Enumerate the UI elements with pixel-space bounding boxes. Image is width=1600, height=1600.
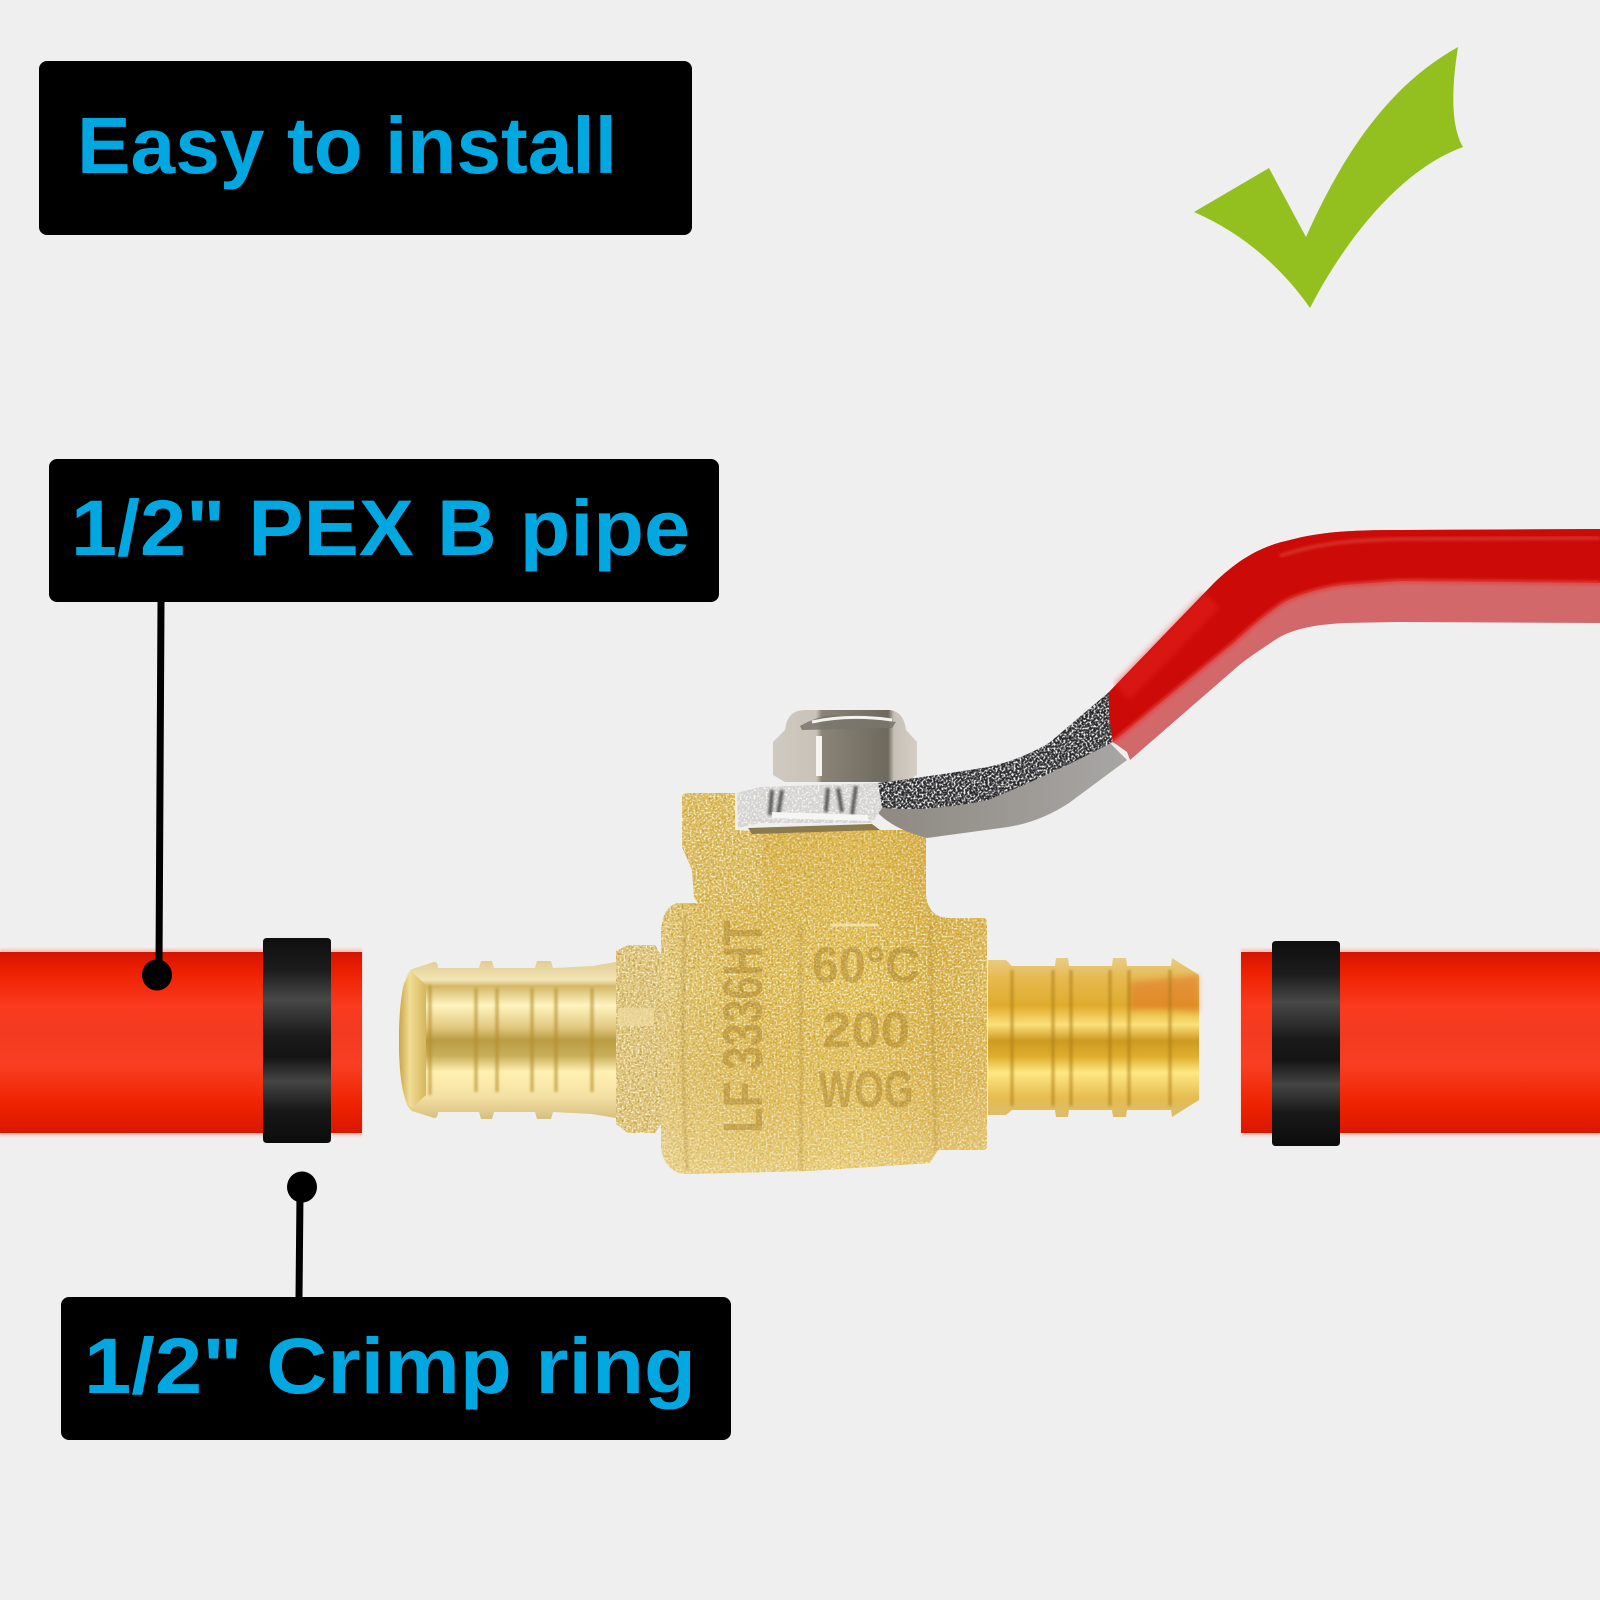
leader: crimp ring [287, 1172, 317, 1297]
label: 1/2" PEX B pipe [49, 459, 719, 602]
lever underside [878, 743, 1127, 838]
embossed body markings: LF 3336HT [711, 920, 774, 1133]
embossed body markings: 60°C [812, 937, 920, 993]
label: 1/2" PEX B pipe: 1/2" PEX B pipe [71, 483, 690, 572]
hex collar [616, 945, 664, 1133]
right crimp ring [1272, 941, 1340, 1146]
label: Easy to install [39, 61, 692, 235]
label: Easy to install: Easy to install [77, 101, 617, 190]
lever pivot tab [682, 793, 772, 906]
chrome washer [737, 783, 882, 834]
hex nut [773, 710, 917, 782]
right barbed fitting [988, 958, 1199, 1117]
label: 1/2" Crimp ring [61, 1297, 731, 1440]
embossed body markings: WOG [818, 1061, 914, 1119]
embossed body markings: 200 [822, 1002, 910, 1058]
right PEX pipe [1241, 949, 1600, 1136]
icon: green check mark [1194, 47, 1463, 308]
label: 1/2" Crimp ring: 1/2" Crimp ring [84, 1321, 696, 1410]
left crimp ring [263, 938, 331, 1143]
embossed body markings [711, 920, 920, 1133]
leader: PEX pipe [142, 602, 172, 990]
ball valve [399, 529, 1600, 1174]
lever steel section [878, 692, 1113, 809]
brass valve body [661, 830, 987, 1174]
red lever grip [1109, 529, 1600, 760]
left barbed fitting [399, 961, 616, 1119]
left PEX pipe [0, 949, 362, 1136]
